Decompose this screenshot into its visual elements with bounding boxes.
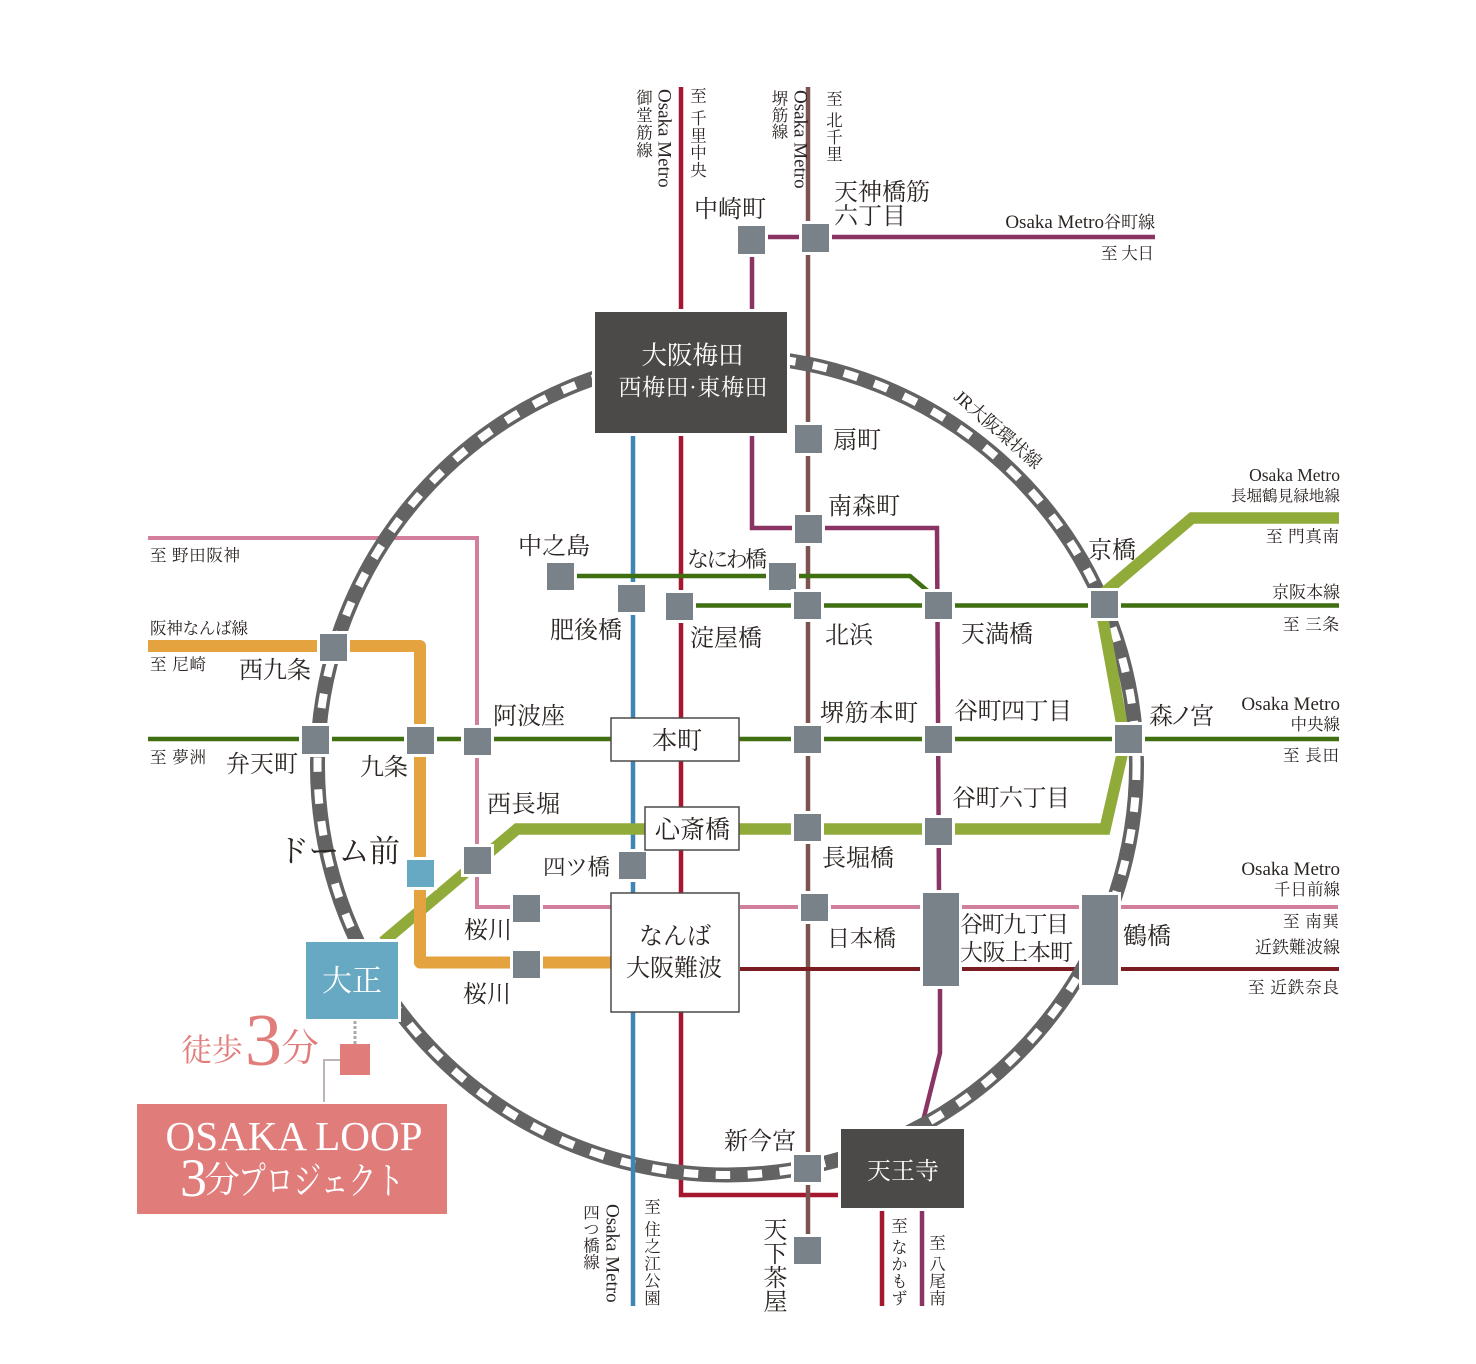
station labels: 谷町六丁目 <box>952 785 1070 812</box>
station labels <box>226 179 1214 1313</box>
line labels: north: 堺筋線 <box>769 90 788 140</box>
station labels: 桜川 <box>464 917 512 944</box>
JR Osaka Loop ring <box>318 356 1136 1175</box>
line: Hanshin Namba orange <box>148 646 612 962</box>
walking time callout: 徒歩 <box>181 1033 243 1068</box>
line labels: east: 中央線 <box>1290 715 1340 734</box>
station box: Namba <box>611 893 739 1012</box>
station: Dome-mae <box>407 860 434 887</box>
station labels: 日本橋 <box>827 926 896 951</box>
project name panel: 分 <box>204 1160 240 1200</box>
station box: Osaka Umeda <box>595 312 787 433</box>
station box: Namba: なんば <box>639 923 711 950</box>
line labels: east: Osaka Metro谷町線 <box>1005 212 1155 233</box>
station labels: 扇町 <box>833 427 881 454</box>
project name panel: プロジェクト <box>238 1161 404 1203</box>
station labels: 谷町九丁目 <box>960 912 1069 937</box>
station labels: 京橋 <box>1088 537 1136 564</box>
station labels: 九条 <box>360 754 408 781</box>
station box: Tennoji: 天王寺 <box>867 1158 939 1185</box>
line labels: south: 四つ橋線 <box>580 1204 600 1270</box>
project name panel: 3 <box>180 1148 207 1208</box>
line labels: west: 阪神なんば線 <box>150 619 248 638</box>
station box: Taisho: 大正 <box>322 965 382 998</box>
station labels: 西長堀 <box>487 791 560 818</box>
station labels: 西九条 <box>239 657 311 684</box>
line labels: east: 京阪本線 <box>1272 583 1340 602</box>
station labels: 天満橋 <box>961 621 1033 648</box>
project marker <box>340 1044 370 1075</box>
station labels: 肥後橋 <box>550 617 622 644</box>
line labels: north <box>634 87 843 189</box>
project name panel: OSAKA LOOP <box>166 1113 422 1159</box>
line labels: east: 近鉄難波線 <box>1255 938 1340 957</box>
station labels: 長堀橋 <box>822 845 894 872</box>
line labels: east <box>1005 212 1340 997</box>
station labels: 鶴橋 <box>1123 923 1171 950</box>
line labels: west <box>150 546 248 767</box>
station box: Shinsaibashi <box>645 807 739 850</box>
line: Midosuji red <box>681 87 882 1306</box>
station labels: 四ツ橋 <box>543 855 610 880</box>
walking time callout: 3 <box>245 1000 282 1082</box>
station box: Namba: 大阪難波 <box>626 955 722 982</box>
station labels: 天神橋筋 <box>834 179 930 206</box>
station labels: 谷町四丁目 <box>954 698 1072 725</box>
line: Tanimachi purple <box>752 237 1155 1306</box>
station labels: 堺筋本町 <box>820 700 918 727</box>
line labels: north: 至 北千里 <box>824 90 843 162</box>
line labels: west: 至 野田阪神 <box>150 546 240 565</box>
line labels: east: 至 長田 <box>1283 746 1339 765</box>
station box: Honmachi <box>611 718 739 761</box>
line labels: south: Osaka Metro <box>602 1204 622 1303</box>
line labels: south <box>580 1198 946 1306</box>
line labels: east: 至 南巽 <box>1283 912 1340 931</box>
station box: Osaka Umeda: 西梅田·東梅田 <box>618 375 768 400</box>
station block: Tsuruhashi <box>1082 895 1118 985</box>
line: Yotsubashi blue <box>631 435 635 1306</box>
line: Chuo and Keihan dark green <box>148 576 1339 739</box>
station labels: 六丁目 <box>834 204 906 230</box>
line labels: east: Osaka Metro <box>1249 465 1340 485</box>
station labels: 桜川 <box>463 981 511 1008</box>
line labels: north: 至 千里中央 <box>688 87 707 178</box>
line labels: east: 千日前線 <box>1274 880 1340 899</box>
leader line to project <box>324 1060 340 1102</box>
station labels: 阿波座 <box>493 703 565 730</box>
ring label: JR Osaka Loop Line: JR大阪環状線 <box>950 386 1046 473</box>
line labels: north: 御堂筋線 <box>634 89 653 158</box>
station labels: 新今宮 <box>724 1128 796 1155</box>
station labels: 大阪上本町 <box>960 940 1073 965</box>
line: Sakaisuji brown <box>806 87 810 1236</box>
stations: grey squares <box>302 224 1142 1264</box>
station labels: 南森町 <box>828 493 900 520</box>
line labels: east: 至 近鉄奈良 <box>1248 978 1339 997</box>
station box: Honmachi: 本町 <box>652 727 702 755</box>
line labels: east: 長堀鶴見緑地線 <box>1231 486 1340 505</box>
dotted walking connector <box>354 1021 356 1044</box>
line labels: east: 至 三条 <box>1283 615 1339 634</box>
station labels: 北浜 <box>825 622 874 649</box>
line labels: south: 至 住之江公園 <box>642 1198 661 1306</box>
walking time callout <box>181 1000 319 1082</box>
line labels: north: Osaka Metro <box>790 90 810 189</box>
line labels: east: Osaka Metro <box>1241 859 1340 880</box>
station labels: 中崎町 <box>694 196 766 223</box>
station box: Osaka Umeda: 大阪梅田 <box>641 341 744 370</box>
line labels: east: 至 門真南 <box>1266 527 1339 546</box>
station labels: 淀屋橋 <box>690 625 762 652</box>
station labels: 弁天町 <box>226 751 298 778</box>
station labels: 森ノ宮 <box>1149 703 1214 730</box>
line labels: east: Osaka Metro <box>1241 694 1340 715</box>
line labels: west: 至 尼崎 <box>150 655 206 674</box>
station labels: なにわ橋 <box>687 547 767 572</box>
walking time callout: 分 <box>281 1028 319 1070</box>
station labels: 中之島 <box>518 533 590 560</box>
station labels: ドーム前 <box>278 834 400 869</box>
line: Nagahori Tsurumi-ryokuchi olive <box>383 518 1339 942</box>
station block: Tanimachi 9-chome <box>923 893 959 986</box>
project name panel <box>137 1104 447 1214</box>
line: Kintetsu dark red <box>740 967 1339 971</box>
line labels: south: 至 なかもず <box>888 1217 908 1306</box>
line labels: south: 至 八尾南 <box>926 1234 946 1306</box>
station box: Shinsaibashi: 心斎橋 <box>655 816 730 844</box>
line labels: west: 至 夢洲 <box>150 748 206 767</box>
station labels: 天下茶屋 <box>759 1217 787 1313</box>
station box: Taisho <box>306 942 398 1019</box>
line: Sennichimae pink <box>148 538 1338 907</box>
station box: Tennoji <box>841 1129 964 1208</box>
line labels: north: Osaka Metro <box>654 89 674 188</box>
line labels: east: 至 大日 <box>1101 244 1154 263</box>
